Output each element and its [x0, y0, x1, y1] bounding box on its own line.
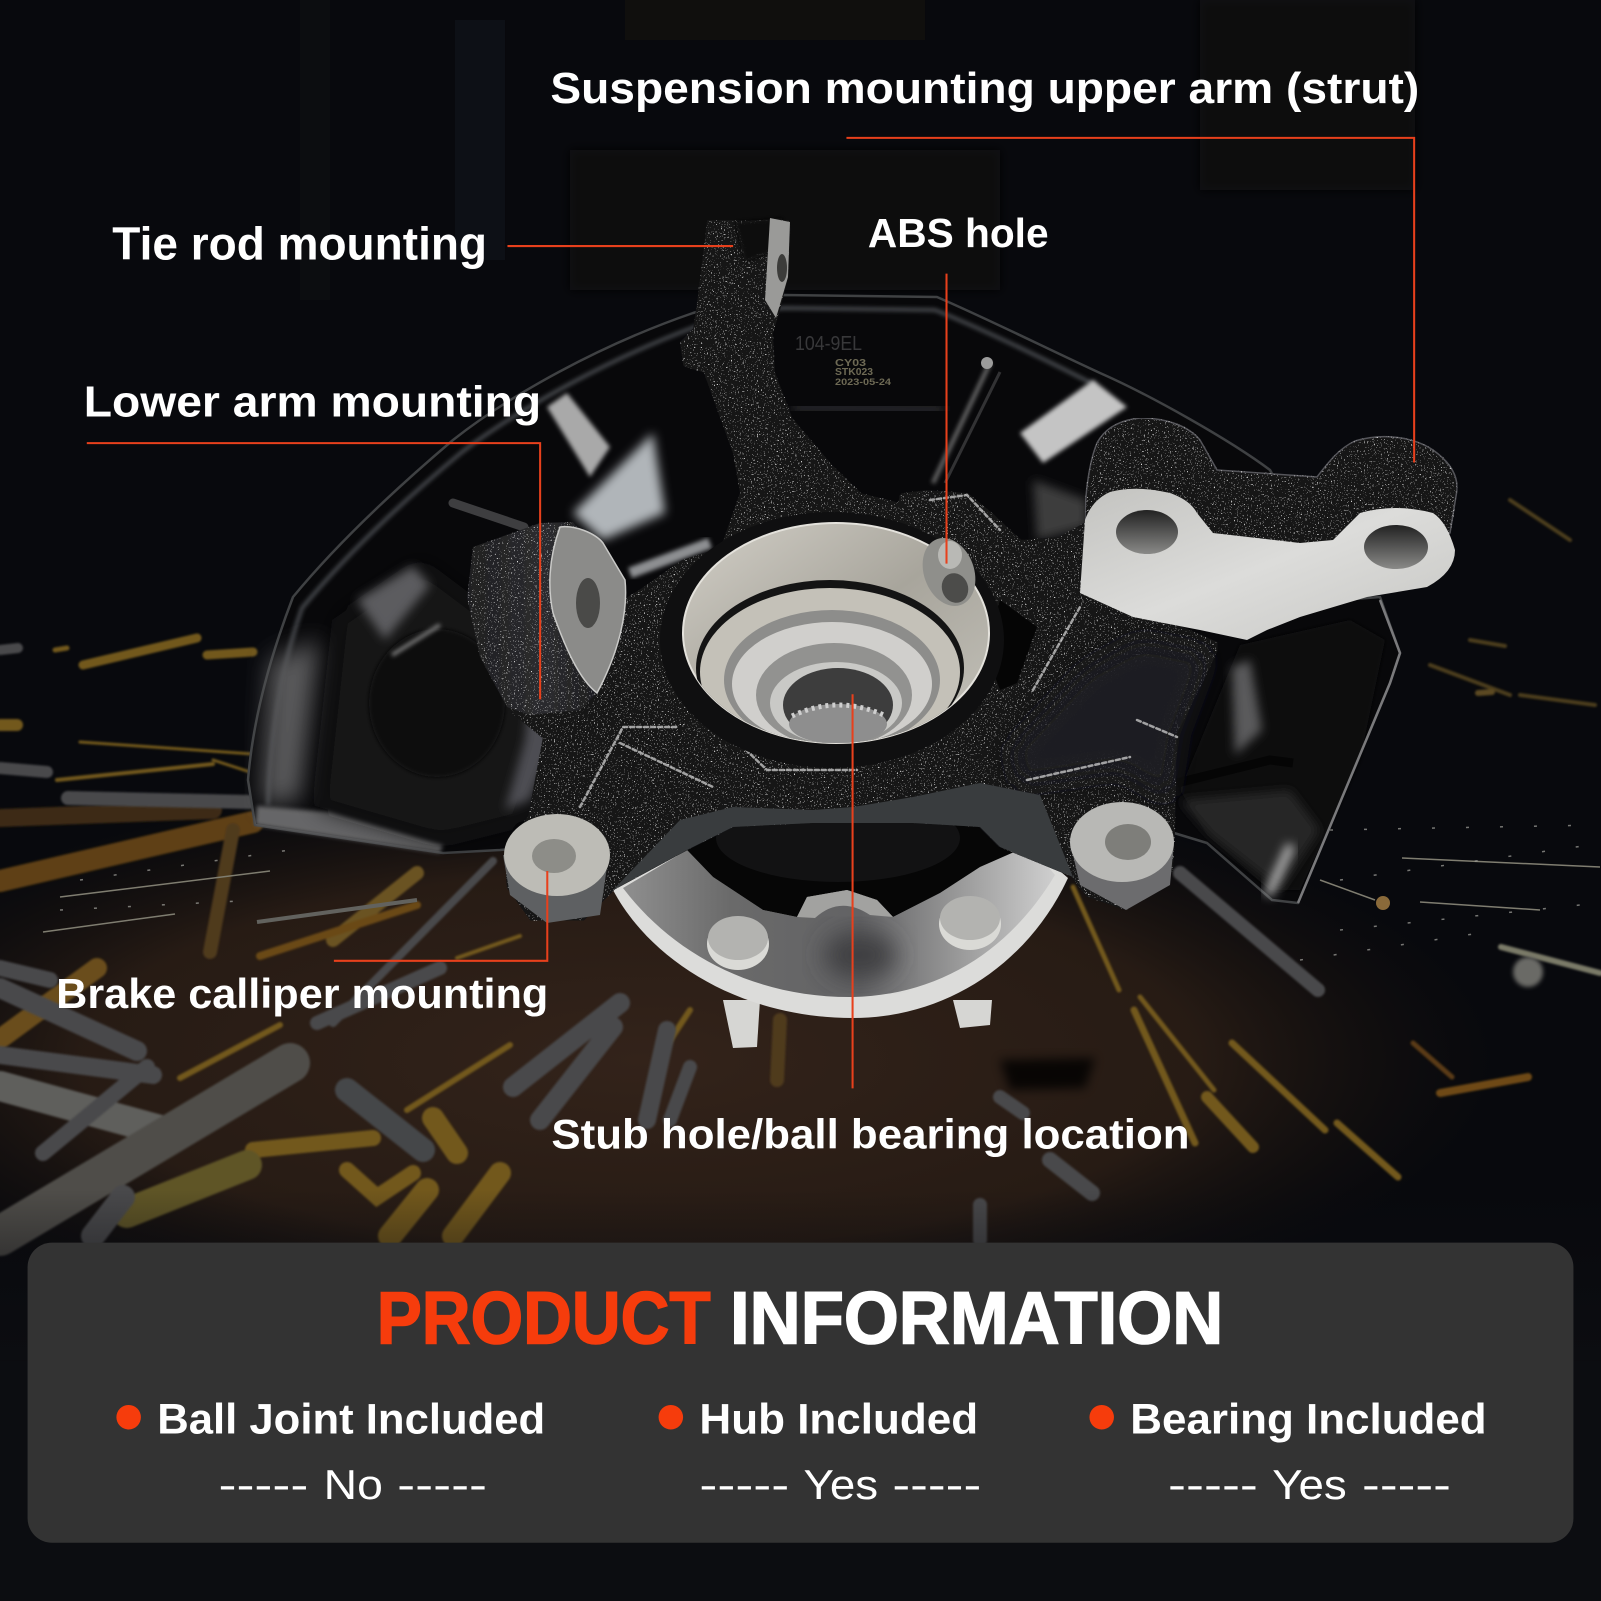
dust shield	[248, 295, 1400, 903]
underside band	[613, 783, 1073, 890]
callout labels	[56, 64, 1419, 1158]
item: ball joint: -----	[397, 1461, 487, 1508]
ABS sensor port	[914, 531, 984, 613]
label: strut: Suspension mounting upper arm (strut)	[550, 64, 1419, 113]
item: bearing: -----	[1168, 1461, 1258, 1508]
item: hub: Hub Included	[699, 1396, 978, 1444]
item: hub	[659, 1396, 981, 1508]
heading	[377, 1277, 1223, 1360]
sparks: brown streaks	[0, 810, 780, 1080]
item: ball joint: -----	[219, 1461, 308, 1508]
item: hub: Yes	[804, 1461, 878, 1508]
item: ball joint	[116, 1396, 545, 1508]
sparks: grey thick streaks	[0, 648, 1600, 1240]
item: bearing: Bearing Included	[1130, 1396, 1487, 1444]
shield stamped text	[795, 333, 891, 387]
label: brake calliper: Brake calliper mounting	[56, 970, 548, 1017]
item: bearing	[1089, 1396, 1487, 1508]
leader: tie rod	[507, 245, 733, 247]
leader: lower arm	[87, 443, 540, 699]
item: bearing: Yes	[1272, 1461, 1347, 1508]
item: bearing: -----	[1362, 1461, 1451, 1508]
knuckle body	[506, 218, 1217, 920]
shield stamped text: STK023	[835, 367, 873, 378]
item: ball joint: Ball Joint Included	[157, 1396, 545, 1444]
lower arm mounting boss	[467, 522, 626, 715]
item: hub: -----	[892, 1461, 981, 1508]
brake calliper bosses	[503, 802, 1174, 923]
shield stamped text: 2023-05-24	[835, 377, 891, 387]
leader: ABS hole	[946, 274, 948, 564]
panel: product information	[28, 1243, 1573, 1543]
sparks: thin lines and specks	[43, 825, 1600, 987]
heading: PRODUCT	[377, 1277, 711, 1360]
label: tie rod: Tie rod mounting	[112, 217, 487, 269]
leader: brake calliper	[334, 871, 547, 961]
hub flange and studs	[613, 794, 1068, 1048]
leader: stub hole	[852, 694, 854, 1088]
shield stamped text: 104-9EL	[795, 333, 862, 355]
label: stub hole: Stub hole/ball bearing location	[551, 1111, 1190, 1158]
item: ball joint: No	[324, 1461, 383, 1508]
bore and bearing	[660, 512, 1004, 768]
heading: INFORMATION	[730, 1277, 1223, 1360]
casting highlights	[580, 495, 1177, 807]
label: lower arm: Lower arm mounting	[84, 378, 541, 427]
leader: strut	[846, 138, 1414, 463]
strut mounting flange	[1080, 418, 1457, 640]
label: ABS hole: ABS hole	[868, 210, 1049, 256]
shield stamped text: CY03	[835, 358, 867, 369]
item: hub: -----	[699, 1461, 789, 1508]
sparks: yellow streaks	[0, 500, 1595, 1236]
callout lines	[87, 138, 1414, 1088]
product photo: steering knuckle with dust shield and hub	[248, 218, 1457, 1048]
